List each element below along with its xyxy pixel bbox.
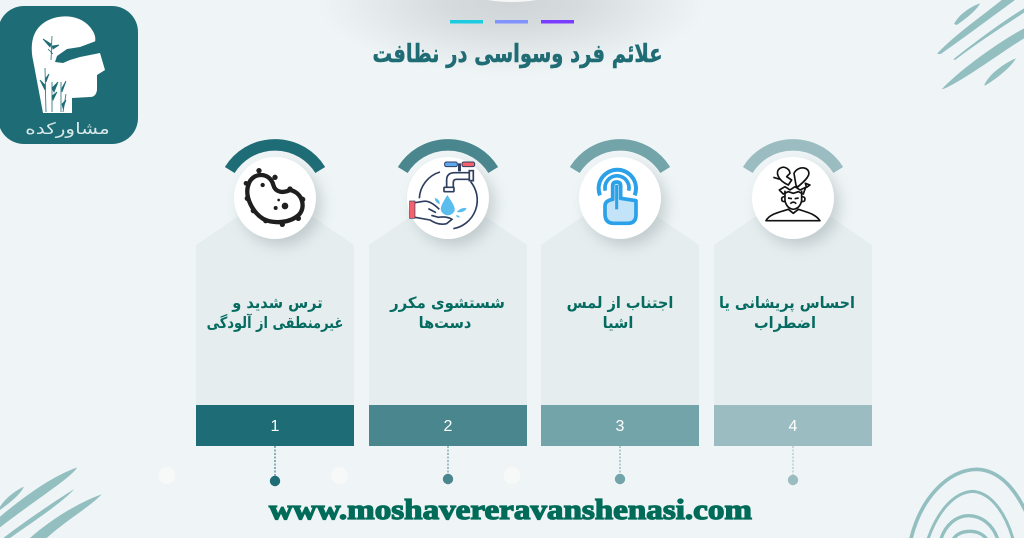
title: علائم فرد وسواسی در نظافت: [372, 40, 663, 69]
panel: step 3: [541, 145, 699, 484]
number bar 1: [196, 405, 354, 446]
text 4: احساس پریشانی یا: [719, 294, 855, 313]
decorative dots: [158, 467, 520, 484]
text 2: شستشوی مکرر: [389, 294, 505, 312]
icon: hand washing under a tap: [410, 162, 477, 229]
text 3: اشیا: [603, 314, 633, 332]
logo hand: [55, 41, 100, 63]
text 4: [719, 294, 855, 332]
text 2: دست‌ها: [419, 314, 472, 332]
number 4: 4: [789, 418, 798, 435]
number bar 4: [714, 405, 872, 446]
arc 1: [230, 145, 320, 170]
logo: [0, 6, 138, 144]
icon: distressed person with broken heart: [766, 167, 820, 221]
arc 4: [748, 145, 838, 170]
arc 3: [575, 145, 665, 170]
text 2: [389, 294, 505, 332]
number bar 3: [541, 405, 699, 446]
number 1: 1: [271, 418, 280, 435]
number 3: 3: [616, 418, 625, 435]
icon: finger touch: [599, 170, 636, 223]
rings bottom right: [911, 469, 1024, 538]
brush strokes top right: [937, 0, 1024, 89]
connector 2: [443, 446, 453, 484]
text 4: اضطراب: [754, 314, 816, 332]
text 1: [207, 294, 343, 332]
logo head: [32, 16, 105, 113]
accent bars: [450, 20, 574, 24]
website url: www.moshavereravanshenasi.com: [269, 494, 752, 526]
text 3: اجتناب از لمس: [567, 294, 673, 312]
number 2: 2: [444, 418, 453, 435]
connector 1: [270, 446, 280, 486]
arc 2: [403, 145, 493, 170]
text 1: غیرمنطقی از آلودگی: [207, 313, 343, 332]
text 1: ترس شدید و: [231, 294, 323, 312]
brush strokes bottom left: [0, 467, 102, 538]
logo plants: [40, 36, 66, 112]
connector 4: [788, 446, 798, 485]
connector 3: [615, 446, 625, 484]
panel: step 2: [369, 145, 527, 484]
panel: step 1: [196, 145, 354, 486]
text 3: [567, 294, 673, 332]
icon: bacteria: [244, 168, 305, 227]
logo wordmark: مشاورکده: [25, 120, 110, 138]
panel: step 4: [714, 145, 872, 485]
number bar 2: [369, 405, 527, 446]
